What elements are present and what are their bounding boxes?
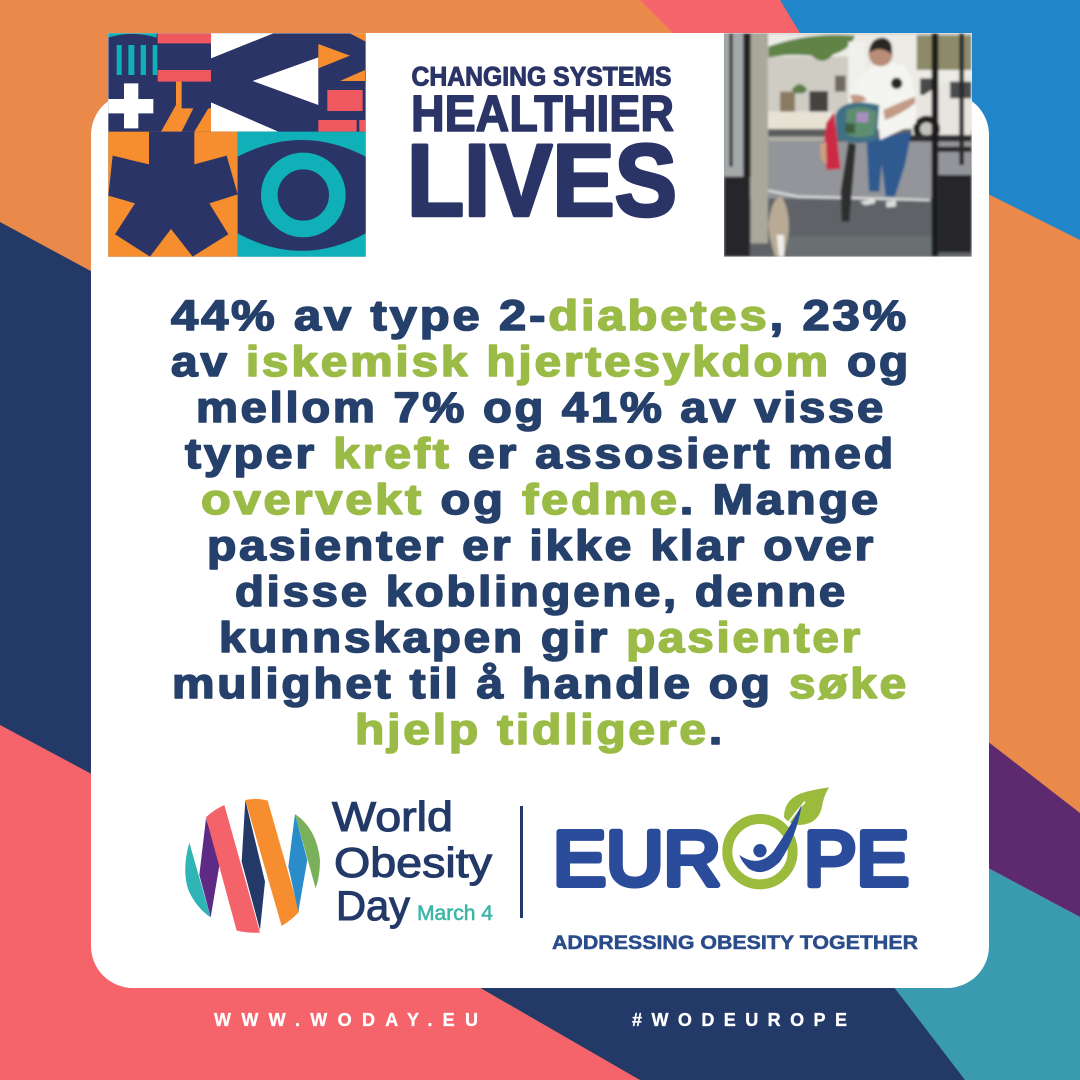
Europe logo: EUR [553,816,721,902]
main message text: disse koblingene, denne [235,568,848,616]
World Obesity Day wordmark: March 4 [417,902,493,925]
Europe logo: PE [804,816,909,902]
logo divider [520,806,523,918]
footer website: WWW.WODAY.EU [214,1010,478,1030]
main message text: mellom 7% og 41% av visse [196,384,886,432]
photo: woman with bicycle and cat at gate [720,32,977,262]
main message text: kunnskapen gir pasienter [219,614,863,662]
campaign title: CHANGING SYSTEMS [412,62,672,92]
footer hashtag: #WODEUROPE [632,1010,847,1030]
Europe tagline: ADDRESSING OBESITY TOGETHER [552,933,918,954]
World Obesity Day wordmark: Obesity [334,839,492,886]
header white strip [108,33,972,257]
main message text: av iskemisk hjertesykdom og [171,338,911,386]
main message text: hjelp tidligere . [355,706,725,754]
Europe logo [553,787,909,902]
main message text: mulighet til å handle og søke [172,660,909,708]
main message text [171,292,911,754]
main message text: pasienter er ikke klar over [207,522,876,570]
World Obesity Day wordmark: World [332,793,453,840]
campaign title: HEALTHIER [411,85,674,142]
white card [91,93,989,988]
mosaic logo artwork [108,33,366,257]
main message text: overvekt og fedme . Mange [201,476,881,524]
main message text: 44% av type 2- diabetes , 23% [171,292,909,340]
World Obesity Day wordmark [332,793,493,929]
campaign title: LIVES [407,124,677,238]
main message text: typer kreft er assosiert med [185,430,896,478]
campaign title [407,62,677,238]
World Obesity Day logo mark [185,799,320,933]
World Obesity Day wordmark: Day [336,882,410,929]
